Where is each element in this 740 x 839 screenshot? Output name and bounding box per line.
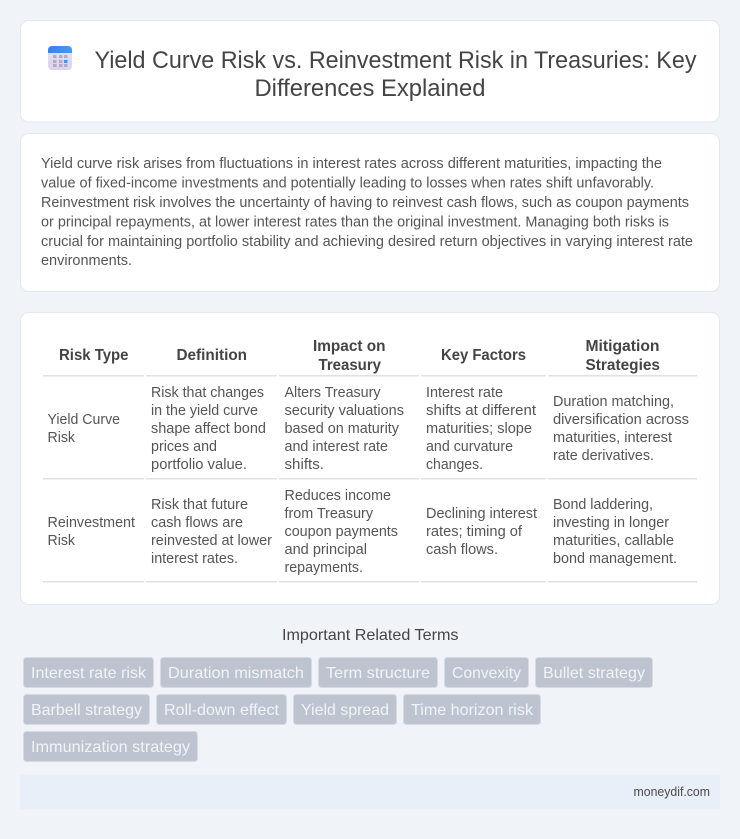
table row: reinvestment risk: reinvested at lower — [151, 533, 272, 549]
tag: term structure: Term structure — [326, 665, 430, 682]
table row: yield curve risk: Yield Curve — [48, 412, 120, 428]
footer bar — [20, 775, 720, 809]
table row: reinvestment risk: and principal — [284, 542, 367, 558]
panel: comparison table card — [20, 312, 720, 604]
tag: term structure — [318, 658, 438, 688]
tag: convexity — [444, 658, 528, 688]
table row: yield curve risk: maturities, interest — [553, 430, 672, 446]
panel: related term tags — [24, 658, 652, 762]
table row: reinvestment risk: coupon payments — [284, 524, 398, 540]
table row: reinvestment risk: bond management. — [553, 551, 677, 567]
panel: title card — [20, 20, 720, 122]
text block: introduction: value of fixed-income investments and potentially leading to losses when rates shift unfavorably. — [41, 176, 654, 192]
tag: interest rate risk: Interest rate risk — [31, 665, 147, 682]
table row: yield curve risk: security valuations — [284, 403, 404, 419]
table row: yield curve risk: Duration matching, — [553, 394, 674, 410]
table row: reinvestment risk: Bond laddering, — [553, 497, 653, 513]
title — [94, 47, 696, 102]
table row: yield curve risk: changes. — [426, 457, 483, 473]
table header row: Treasury — [318, 357, 381, 374]
table header row — [59, 338, 660, 374]
table row: yield curve risk: maturities; slope — [426, 421, 532, 437]
tag: time horizon risk: Time horizon risk — [411, 702, 534, 719]
tag: time horizon risk — [404, 694, 540, 724]
text block: introduction — [41, 156, 693, 269]
tag: yield spread — [294, 694, 396, 724]
tag: interest rate risk — [24, 658, 154, 688]
tag: convexity: Convexity — [452, 665, 521, 682]
tag: duration mismatch: Duration mismatch — [168, 665, 304, 682]
table row: reinvestment risk: cash flows are — [151, 515, 243, 531]
text block: introduction: crucial for maintaining portfolio stability and achieving desired return objectives in varying interest rate — [41, 234, 693, 250]
table row: yield curve risk: diversification across — [553, 412, 689, 428]
table row: yield curve risk: in the yield curve — [151, 403, 258, 419]
table row: reinvestment risk: from Treasury — [284, 506, 374, 522]
table row: yield curve risk: and interest rate — [284, 439, 388, 455]
table row: yield curve risk: portfolio value. — [151, 457, 247, 473]
title: Yield Curve Risk vs. Reinvestment Risk in Treasuries: Key — [94, 47, 696, 74]
text block: introduction: Yield curve risk arises from fluctuations in interest rates across different maturities, impacting the — [41, 156, 662, 172]
tag: yield spread: Yield spread — [301, 702, 389, 719]
table row: yield curve risk: Interest rate — [426, 385, 503, 401]
text block: introduction: environments. — [41, 253, 132, 269]
table header row: Strategies — [586, 357, 660, 374]
table row: yield curve risk: shifts. — [284, 457, 324, 473]
table row: yield curve risk: Risk that changes — [151, 385, 264, 401]
tag: duration mismatch — [160, 658, 312, 688]
table row: reinvestment risk: Risk that future — [151, 497, 248, 513]
icon: calendar — [48, 46, 72, 70]
text block: introduction: or principal repayments, at lower interest rates than the original investment. Managing both risks is — [41, 214, 669, 230]
table row: yield curve risk: based on maturity — [284, 421, 400, 437]
tag: roll-down effect — [156, 694, 286, 724]
table row: yield curve risk: Risk — [48, 430, 76, 446]
tag: barbell strategy: Barbell strategy — [31, 702, 142, 719]
table header row: Mitigation — [586, 338, 660, 355]
table row: yield curve risk: prices and — [151, 439, 217, 455]
title: Differences Explained — [254, 75, 486, 102]
table row: yield curve risk — [48, 385, 689, 473]
table row: yield curve risk: and curvature — [426, 439, 513, 455]
table header row: Definition — [176, 347, 247, 364]
table row: reinvestment risk: Reinvestment — [48, 515, 135, 531]
tag: bullet strategy — [536, 658, 652, 688]
table row: yield curve risk: shifts at different — [426, 403, 536, 419]
heading: important related terms: Important Related Terms — [282, 627, 458, 644]
tag: immunization strategy — [24, 732, 198, 762]
table row: reinvestment risk: Risk — [48, 533, 76, 549]
table row: reinvestment risk: rates; timing of — [426, 524, 523, 540]
table header row: Key Factors — [441, 347, 526, 364]
tag: roll-down effect: Roll-down effect — [164, 702, 280, 719]
panel: intro text card — [20, 134, 720, 292]
table row: yield curve risk: Alters Treasury — [284, 385, 381, 401]
table row: reinvestment risk: repayments. — [284, 560, 363, 576]
table row: yield curve risk: shape affect bond — [151, 421, 266, 437]
text block: introduction: Reinvestment risk involves the uncertainty of having to reinvest cash flows, such as coupon payments — [41, 195, 689, 211]
table row: yield curve risk: rate derivatives. — [553, 448, 654, 464]
table header row: Impact on — [313, 338, 386, 355]
footer: source: moneydif.com — [634, 784, 710, 799]
tag: immunization strategy: Immunization strategy — [31, 739, 190, 756]
tag: bullet strategy: Bullet strategy — [543, 665, 645, 682]
table row: reinvestment risk: Declining interest — [426, 506, 537, 522]
table row: reinvestment risk: cash flows. — [426, 542, 498, 558]
table row: reinvestment risk: maturities, callable — [553, 533, 674, 549]
tag: barbell strategy — [24, 694, 150, 724]
table row: reinvestment risk — [48, 488, 677, 576]
table row: reinvestment risk: Reduces income — [284, 488, 391, 504]
table header row: Risk Type — [59, 347, 129, 364]
table row: reinvestment risk: interest rates. — [151, 551, 238, 567]
table row: reinvestment risk: investing in longer — [553, 515, 669, 531]
